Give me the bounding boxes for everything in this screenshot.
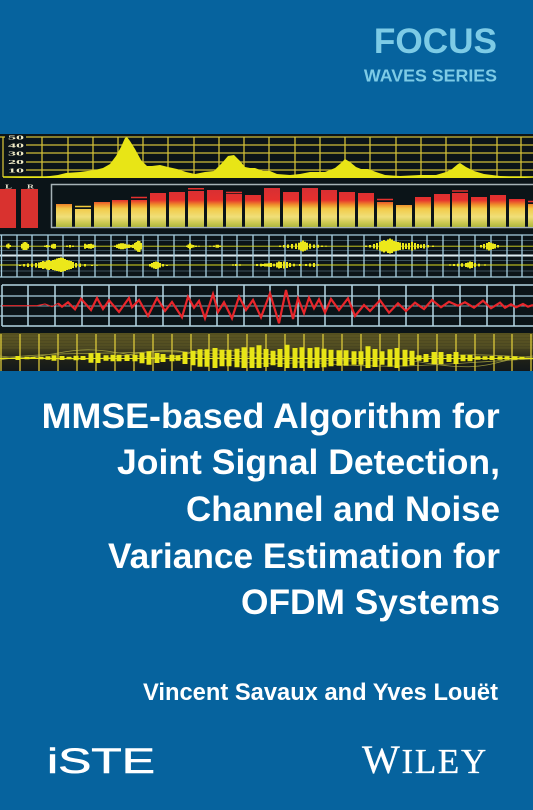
book title: Variance Estimation for bbox=[108, 536, 500, 576]
scale labels: 30 bbox=[8, 150, 24, 158]
peak markers bbox=[75, 206, 91, 208]
channel labels: L bbox=[5, 184, 12, 190]
book title: Joint Signal Detection, bbox=[117, 442, 500, 482]
Wiley logo: WILEY bbox=[362, 737, 488, 782]
yellow spectrum area bbox=[3, 137, 533, 178]
spectrum chart bbox=[0, 134, 533, 178]
series name: FOCUS bbox=[374, 22, 497, 61]
audio meter illustration bbox=[0, 134, 533, 371]
scale labels: 50 bbox=[8, 134, 24, 142]
scale labels: 10 bbox=[8, 168, 24, 174]
book title: MMSE-based Algorithm for bbox=[42, 396, 500, 436]
book title bbox=[42, 396, 500, 622]
series label bbox=[364, 22, 497, 86]
yellow bar oscillogram bbox=[0, 333, 533, 371]
red signal line bbox=[2, 290, 533, 323]
book title: Channel and Noise bbox=[186, 489, 500, 529]
book title: OFDM Systems bbox=[241, 582, 500, 622]
scale labels bbox=[5, 134, 26, 175]
waveform panel bbox=[0, 235, 533, 277]
yellow bars bbox=[18, 345, 522, 368]
authors: Vincent Savaux and Yves Louët bbox=[143, 680, 498, 706]
series subtitle: WAVES SERIES bbox=[364, 66, 497, 86]
iSTE logo: iSTE bbox=[47, 742, 155, 781]
scale labels: 20 bbox=[8, 159, 24, 166]
left and right level meters bbox=[0, 184, 38, 228]
black band bbox=[0, 134, 533, 371]
yellow waveforms bbox=[0, 246, 533, 265]
left and right level meters: R bbox=[27, 184, 35, 190]
equalizer bars bbox=[52, 184, 533, 228]
scale labels: 40 bbox=[8, 142, 24, 150]
red oscillation panel bbox=[0, 285, 533, 326]
